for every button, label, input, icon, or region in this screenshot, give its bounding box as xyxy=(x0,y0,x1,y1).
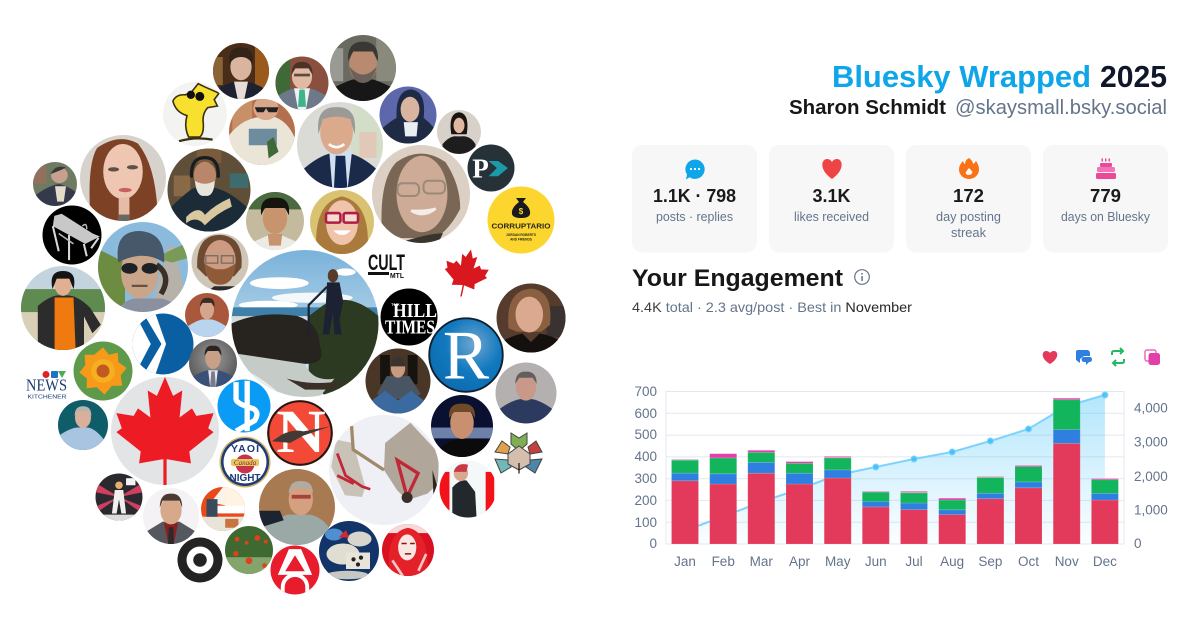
avatar: massage table image xyxy=(42,206,102,264)
bars: Nov xyxy=(1053,398,1080,544)
stat card: likes received xyxy=(769,145,894,252)
stat card: day posting streak: day posting xyxy=(936,209,1001,224)
bars: Feb xyxy=(710,454,737,544)
month labels: Feb xyxy=(712,554,735,569)
right axis labels: 2,000 xyxy=(1134,469,1168,484)
avatar: man in front of brick wall xyxy=(185,293,229,337)
avatar: P logo: P xyxy=(472,153,489,183)
avatar: bearded man reading xyxy=(168,148,250,232)
avatar: Hill Times logo xyxy=(380,288,438,346)
avatar: Hill Times logo: THE xyxy=(391,302,400,307)
logo: Cult MTL: CULT xyxy=(368,250,405,275)
avatar: Blue Jays illustration xyxy=(319,521,379,581)
bars: Aug xyxy=(939,498,966,544)
bars: Dec xyxy=(1091,479,1118,544)
right axis labels xyxy=(1134,400,1168,551)
avatar: man in dark suit xyxy=(213,43,269,99)
avatar: Hill Times logo: TIMES xyxy=(385,316,435,338)
avatar: large lakeside hiker photo xyxy=(232,250,378,397)
logo: hexagonal maple pattern xyxy=(495,433,542,474)
month labels xyxy=(674,554,1117,569)
legend: likes xyxy=(1043,351,1057,364)
avatar: target logo xyxy=(178,538,222,582)
avatar: man with red shirt and tie xyxy=(143,488,199,544)
avatar: red A logo xyxy=(270,546,320,594)
heading: Your Engagement: Your Engagement xyxy=(632,265,843,292)
avatar: seated man xyxy=(366,348,430,414)
avatar: rugged man xyxy=(330,35,396,101)
logo: Cult MTL: MTL xyxy=(390,271,404,280)
avatar: red-tinted woman xyxy=(382,524,434,576)
legend: reposts xyxy=(1112,348,1124,366)
stat card: posts and replies: posts · replies xyxy=(656,209,733,224)
left axis labels: 100 xyxy=(634,515,657,530)
avatar: Yaoi Night Canada badge: NIGHT xyxy=(230,473,260,484)
left axis labels xyxy=(634,384,657,551)
avatar: comic strip with red sign xyxy=(201,487,245,531)
stat card: day posting streak xyxy=(906,145,1031,252)
avatar: R logo xyxy=(429,317,503,394)
avatar: small man in suit xyxy=(33,162,77,206)
left axis labels: 400 xyxy=(634,449,657,464)
left axis labels: 600 xyxy=(634,406,657,421)
left axis labels: 0 xyxy=(649,536,657,551)
bars: May xyxy=(824,456,851,544)
stat card: likes received: 3.1K xyxy=(812,185,851,206)
icon: heart xyxy=(822,159,842,179)
bars: Jan xyxy=(672,459,698,544)
right axis labels: 0 xyxy=(1134,536,1142,551)
chart: monthly engagement stacked bars with cumulative line xyxy=(634,384,1168,569)
stat card: days on Bluesky: 779 xyxy=(1090,185,1121,206)
chart gridlines xyxy=(666,392,1124,544)
avatar: Corruptario logo: AND FRIENDS xyxy=(510,238,532,242)
logo: red maple leaf xyxy=(440,245,492,301)
avatar: bearded man with glasses xyxy=(192,234,248,290)
legend: quotes xyxy=(1145,350,1160,365)
avatar: R logo: R xyxy=(443,317,490,394)
avatar: man in suit, grey backdrop xyxy=(189,339,237,387)
profile name and handle xyxy=(789,96,1167,119)
right axis labels: 1,000 xyxy=(1134,502,1168,518)
avatar: woman with red glasses xyxy=(310,190,374,254)
month labels: Jul xyxy=(905,554,923,569)
logo: CTV News Kitchener: NEWS xyxy=(26,376,67,394)
avatar: poppy field xyxy=(225,526,273,574)
bars: Jul xyxy=(900,491,928,544)
avatar: Yaoi Night Canada badge: YAOI xyxy=(231,443,259,455)
avatar: man in front of night city xyxy=(431,395,493,457)
title: Bluesky Wrapped xyxy=(832,60,1091,94)
avatar: big Canadian maple leaf xyxy=(111,377,219,485)
bars: Apr xyxy=(786,462,813,544)
right axis labels: 4,000 xyxy=(1134,400,1168,416)
icon: flame xyxy=(959,158,979,179)
right axis labels: 3,000 xyxy=(1134,434,1168,450)
avatar: red N logo xyxy=(267,399,333,466)
month labels: Dec xyxy=(1093,554,1117,569)
avatar: man with green tie xyxy=(276,56,328,110)
title: 2025 xyxy=(1100,60,1167,94)
bars: Sep xyxy=(977,476,1004,544)
avatar: orange flower xyxy=(74,342,132,400)
avatar: Corruptario logo: JORDAN ROBERTS xyxy=(506,233,536,237)
avatar: Yaoi Night Canada badge: Canada xyxy=(234,459,257,467)
bars: Oct xyxy=(1015,466,1042,544)
avatar: woman in black top xyxy=(437,110,481,154)
avatar: Mark Carney portrait xyxy=(297,102,383,188)
left axis labels: 200 xyxy=(634,493,657,508)
engagement summary: 4.4K total · 2.3 avg/post · Best in November xyxy=(632,299,912,315)
left axis labels: 500 xyxy=(634,427,657,442)
avatar: man with sunglasses on brown backdrop xyxy=(259,469,335,545)
cumulative points xyxy=(873,392,1108,470)
avatar: blue chevron logo xyxy=(132,314,194,374)
avatar: man in grey xyxy=(496,362,556,424)
stat card: day posting streak: streak xyxy=(951,225,986,240)
avatar: man against teal wall xyxy=(58,400,108,450)
chart legend icons xyxy=(1043,348,1160,366)
bars: Jun xyxy=(862,492,889,544)
left axis labels: 300 xyxy=(634,471,657,486)
stat card: days on Bluesky xyxy=(1043,145,1168,252)
logo: Cult MTL xyxy=(368,250,405,280)
avatar: man in bike helmet and sunglasses xyxy=(98,222,188,312)
avatar: Hill Times logo: HILL xyxy=(393,300,437,322)
avatar: blue S logo xyxy=(218,380,270,432)
month labels: May xyxy=(825,554,851,569)
icon: info xyxy=(855,270,869,284)
avatar: woman in black top xyxy=(496,284,566,352)
avatar cluster xyxy=(21,35,566,594)
legend: replies xyxy=(1076,350,1092,365)
avatar: Yaoi Night Canada badge xyxy=(220,436,270,488)
avatar: Corruptario logo xyxy=(488,186,554,254)
stat card: day posting streak: 172 xyxy=(953,185,984,206)
avatar: reindeer photo xyxy=(329,415,439,525)
stat card: posts and replies: 1.1K · 798 xyxy=(653,185,736,206)
avatar: P logo xyxy=(468,144,514,192)
bars: Mar xyxy=(748,450,775,544)
avatar: young man xyxy=(246,192,304,250)
month labels: Oct xyxy=(1018,554,1039,569)
avatar: Corruptario logo: $ xyxy=(519,207,524,216)
logo: CTV News Kitchener: KITCHENER xyxy=(28,394,67,400)
month labels: Jan xyxy=(674,554,696,569)
stat card: posts and replies xyxy=(632,145,757,252)
logo: CTV News Kitchener xyxy=(26,371,67,400)
month labels: Mar xyxy=(750,554,773,569)
cumulative line xyxy=(685,395,1105,531)
month labels: Jun xyxy=(865,554,887,569)
stat card: likes received: likes received xyxy=(794,209,869,224)
left axis labels: 700 xyxy=(634,384,657,399)
month labels: Sep xyxy=(978,554,1002,569)
avatar: smiling woman with glasses xyxy=(372,145,470,243)
avatar: woman with Canadian flag borders xyxy=(440,460,496,518)
avatar: Corruptario logo: CORRUPTARIO xyxy=(492,222,551,230)
cumulative area xyxy=(685,395,1105,544)
month labels: Nov xyxy=(1055,554,1079,569)
profile name and handle: @skaysmall.bsky.social xyxy=(955,96,1167,119)
avatar: illustrated figure with pink rays xyxy=(96,474,142,520)
avatar: Woodstock bird xyxy=(163,82,227,146)
icon: speech bubble xyxy=(685,160,705,180)
profile name and handle: Sharon Schmidt xyxy=(789,96,946,119)
avatar: man in hoodie xyxy=(380,86,436,144)
avatar: man in white sweatshirt with sunglasses xyxy=(229,96,295,165)
icon: birthday cake xyxy=(1096,158,1116,179)
stat card: days on Bluesky: days on Bluesky xyxy=(1061,209,1150,224)
month labels: Apr xyxy=(789,554,811,569)
month labels: Aug xyxy=(940,554,964,569)
avatar: red N logo: N xyxy=(276,399,326,466)
avatar: woman in orange shirt xyxy=(21,266,105,350)
avatar: redhead woman xyxy=(80,135,166,221)
